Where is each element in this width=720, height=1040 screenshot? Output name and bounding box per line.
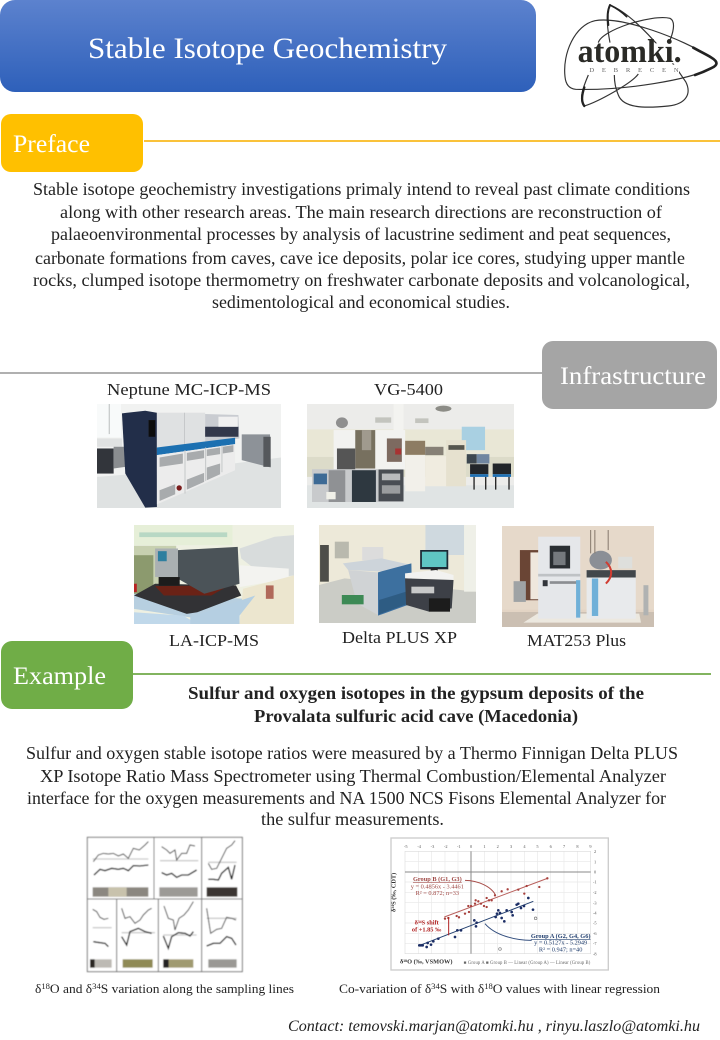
caption: co-variation with linear regression: 18 <box>484 982 493 991</box>
annotation text: group A <box>531 933 590 953</box>
title banner <box>0 0 536 92</box>
section header: Preface <box>1 114 720 172</box>
axis ticks: -3 <box>431 844 434 849</box>
annotation text: group A: R² = 0.947; n=40 <box>539 946 582 953</box>
axis ticks: 1 <box>594 859 596 864</box>
preface paragraph: palaeoenvironmental processes by analysis of lacustrine sediment and peat sequences, <box>51 224 671 244</box>
label: LA-ICP-MS: LA-ICP-MS <box>169 631 259 650</box>
axis titles and legend: δ³⁴S (‰, CDT) <box>391 873 398 912</box>
chart: S and O isotope linear regression <box>391 838 608 970</box>
axis titles and legend <box>391 873 591 966</box>
caption: variation along sampling lines: 18 <box>41 982 50 991</box>
logo subtitle: DEBRECEN <box>589 67 679 74</box>
axis ticks: -6 <box>593 931 597 936</box>
axis ticks: 2 <box>594 849 596 854</box>
regression lines <box>420 878 548 945</box>
annotation text: shift: δ³⁴S shift <box>415 919 440 926</box>
section header: Preface: Preface <box>13 131 90 158</box>
axis ticks: -7 <box>593 941 597 946</box>
logo: atomki Debrecen <box>565 5 716 107</box>
annotation text: group B: y = 0.4856x - 3.4461 <box>411 883 464 890</box>
example paragraph <box>26 743 678 829</box>
axis ticks: -5 <box>404 844 408 849</box>
axis ticks: -4 <box>593 910 597 915</box>
annotation text: group B: Group B (G1, G3) <box>413 876 462 883</box>
example paragraph: the sulfur measurements. <box>261 809 444 829</box>
caption: co-variation with linear regression: S with δ <box>440 982 484 996</box>
axis ticks: 7 <box>563 844 566 849</box>
preface paragraph <box>33 179 690 312</box>
label: MAT253 Plus: MAT253 Plus <box>527 631 626 650</box>
section header: Example <box>1 641 711 709</box>
axis ticks: -1 <box>457 844 461 849</box>
axis titles and legend: ■ Group A ■ Group B — Linear (Group A) — Linear (Group B) <box>464 961 591 966</box>
photo: Delta PLUS XP instrument <box>319 525 476 623</box>
axis ticks: 0 <box>470 844 472 849</box>
annotation text: shift: of +1.85 ‰ <box>412 926 442 933</box>
axis ticks: -8 <box>593 951 597 956</box>
label: Delta PLUS XP: Delta PLUS XP <box>342 628 457 647</box>
title: Stable Isotope Geochemistry <box>88 32 447 65</box>
annotation arrows <box>449 880 532 940</box>
caption: co-variation with linear regression: O values with linear regression <box>493 982 661 996</box>
preface paragraph: rocks, clumped isotope thermometry on freshwater carbonate deposits and volcanological, <box>33 270 690 290</box>
example paragraph: Sulfur and oxygen stable isotope ratios were measured by a Thermo Finnigan Delta PLUS <box>26 743 678 763</box>
preface paragraph: along with other research areas. The main research directions are reconstruction of <box>60 202 662 222</box>
section header: Infrastructure <box>0 341 717 409</box>
caption: co-variation with linear regression: 34 <box>431 982 440 991</box>
caption: variation along sampling lines: S variation along the sampling lines <box>101 982 294 996</box>
example paragraph: XP Isotope Ratio Mass Spectrometer using Thermal Combustion/Elemental Analyzer <box>40 766 666 786</box>
axis ticks: 2 <box>497 844 499 849</box>
example heading <box>188 683 644 726</box>
axis ticks: -3 <box>593 900 597 905</box>
axis ticks: -2 <box>444 844 448 849</box>
caption: variation along sampling lines: δ <box>35 982 41 996</box>
logo wordmark: atomki. <box>578 34 682 70</box>
caption: variation along sampling lines: O and δ <box>50 982 92 996</box>
chart: isotope variation panels <box>87 837 242 972</box>
annotation text: group B <box>411 876 464 897</box>
axis ticks <box>404 844 597 956</box>
annotation text: shift <box>412 919 442 933</box>
axis titles and legend: δ¹⁸O (‰, VSMOW) <box>400 958 452 965</box>
axis ticks: 1 <box>483 844 485 849</box>
annotation text: group B: R² = 0.872; n=33 <box>416 890 459 897</box>
axis ticks: -5 <box>593 921 597 926</box>
axis ticks: 4 <box>523 844 526 849</box>
axis ticks: 5 <box>536 844 538 849</box>
annotation text: group A: Group A (G2, G4, G6) <box>531 933 590 940</box>
photo: VG-5400 instrument <box>307 404 514 508</box>
preface paragraph: Stable isotope geochemistry investigations primaly intend to reveal past climate conditions <box>33 179 690 199</box>
caption: co-variation with linear regression: Co-variation of δ <box>339 982 425 996</box>
photo: LA-ICP-MS instrument <box>134 525 294 624</box>
contact line: Contact: temovski.marjan@atomki.hu , rinyu.laszlo@atomki.hu <box>288 1018 700 1035</box>
section header: Infrastructure: Infrastructure <box>560 363 706 390</box>
preface paragraph: sedimentological and economical studies. <box>212 292 510 312</box>
photo: MAT253 Plus instrument <box>502 526 654 627</box>
preface paragraph: carbonate formations from caves, cave ice deposits, polar ice cores, studying upper mantle <box>35 248 685 268</box>
photo: Neptune instrument <box>97 404 281 508</box>
annotation text: group A: y = 0.5127x - 5.2949 <box>534 940 587 947</box>
example heading: Provalata sulfuric acid cave (Macedonia) <box>254 706 578 726</box>
axis ticks: 3 <box>510 844 512 849</box>
axis ticks: -2 <box>593 890 597 895</box>
axis ticks: 0 <box>594 870 596 875</box>
axis ticks: -4 <box>417 844 422 849</box>
example heading: Sulfur and oxygen isotopes in the gypsum deposits of the <box>188 683 644 703</box>
axis ticks: 9 <box>589 844 591 849</box>
label: Neptune MC-ICP-MS: Neptune MC-ICP-MS <box>107 380 271 399</box>
axis ticks: 8 <box>576 844 578 849</box>
example paragraph: interface for the oxygen measurements and NA 1500 NCS Fisons Elemental Analyzer for <box>27 788 666 808</box>
label: VG-5400: VG-5400 <box>374 380 443 399</box>
axis ticks: -1 <box>593 880 597 885</box>
group B points <box>444 877 548 920</box>
axis ticks: 6 <box>550 844 553 849</box>
section header: Example: Example <box>13 663 106 690</box>
group A points <box>418 897 534 948</box>
caption: variation along sampling lines: 34 <box>92 982 101 991</box>
